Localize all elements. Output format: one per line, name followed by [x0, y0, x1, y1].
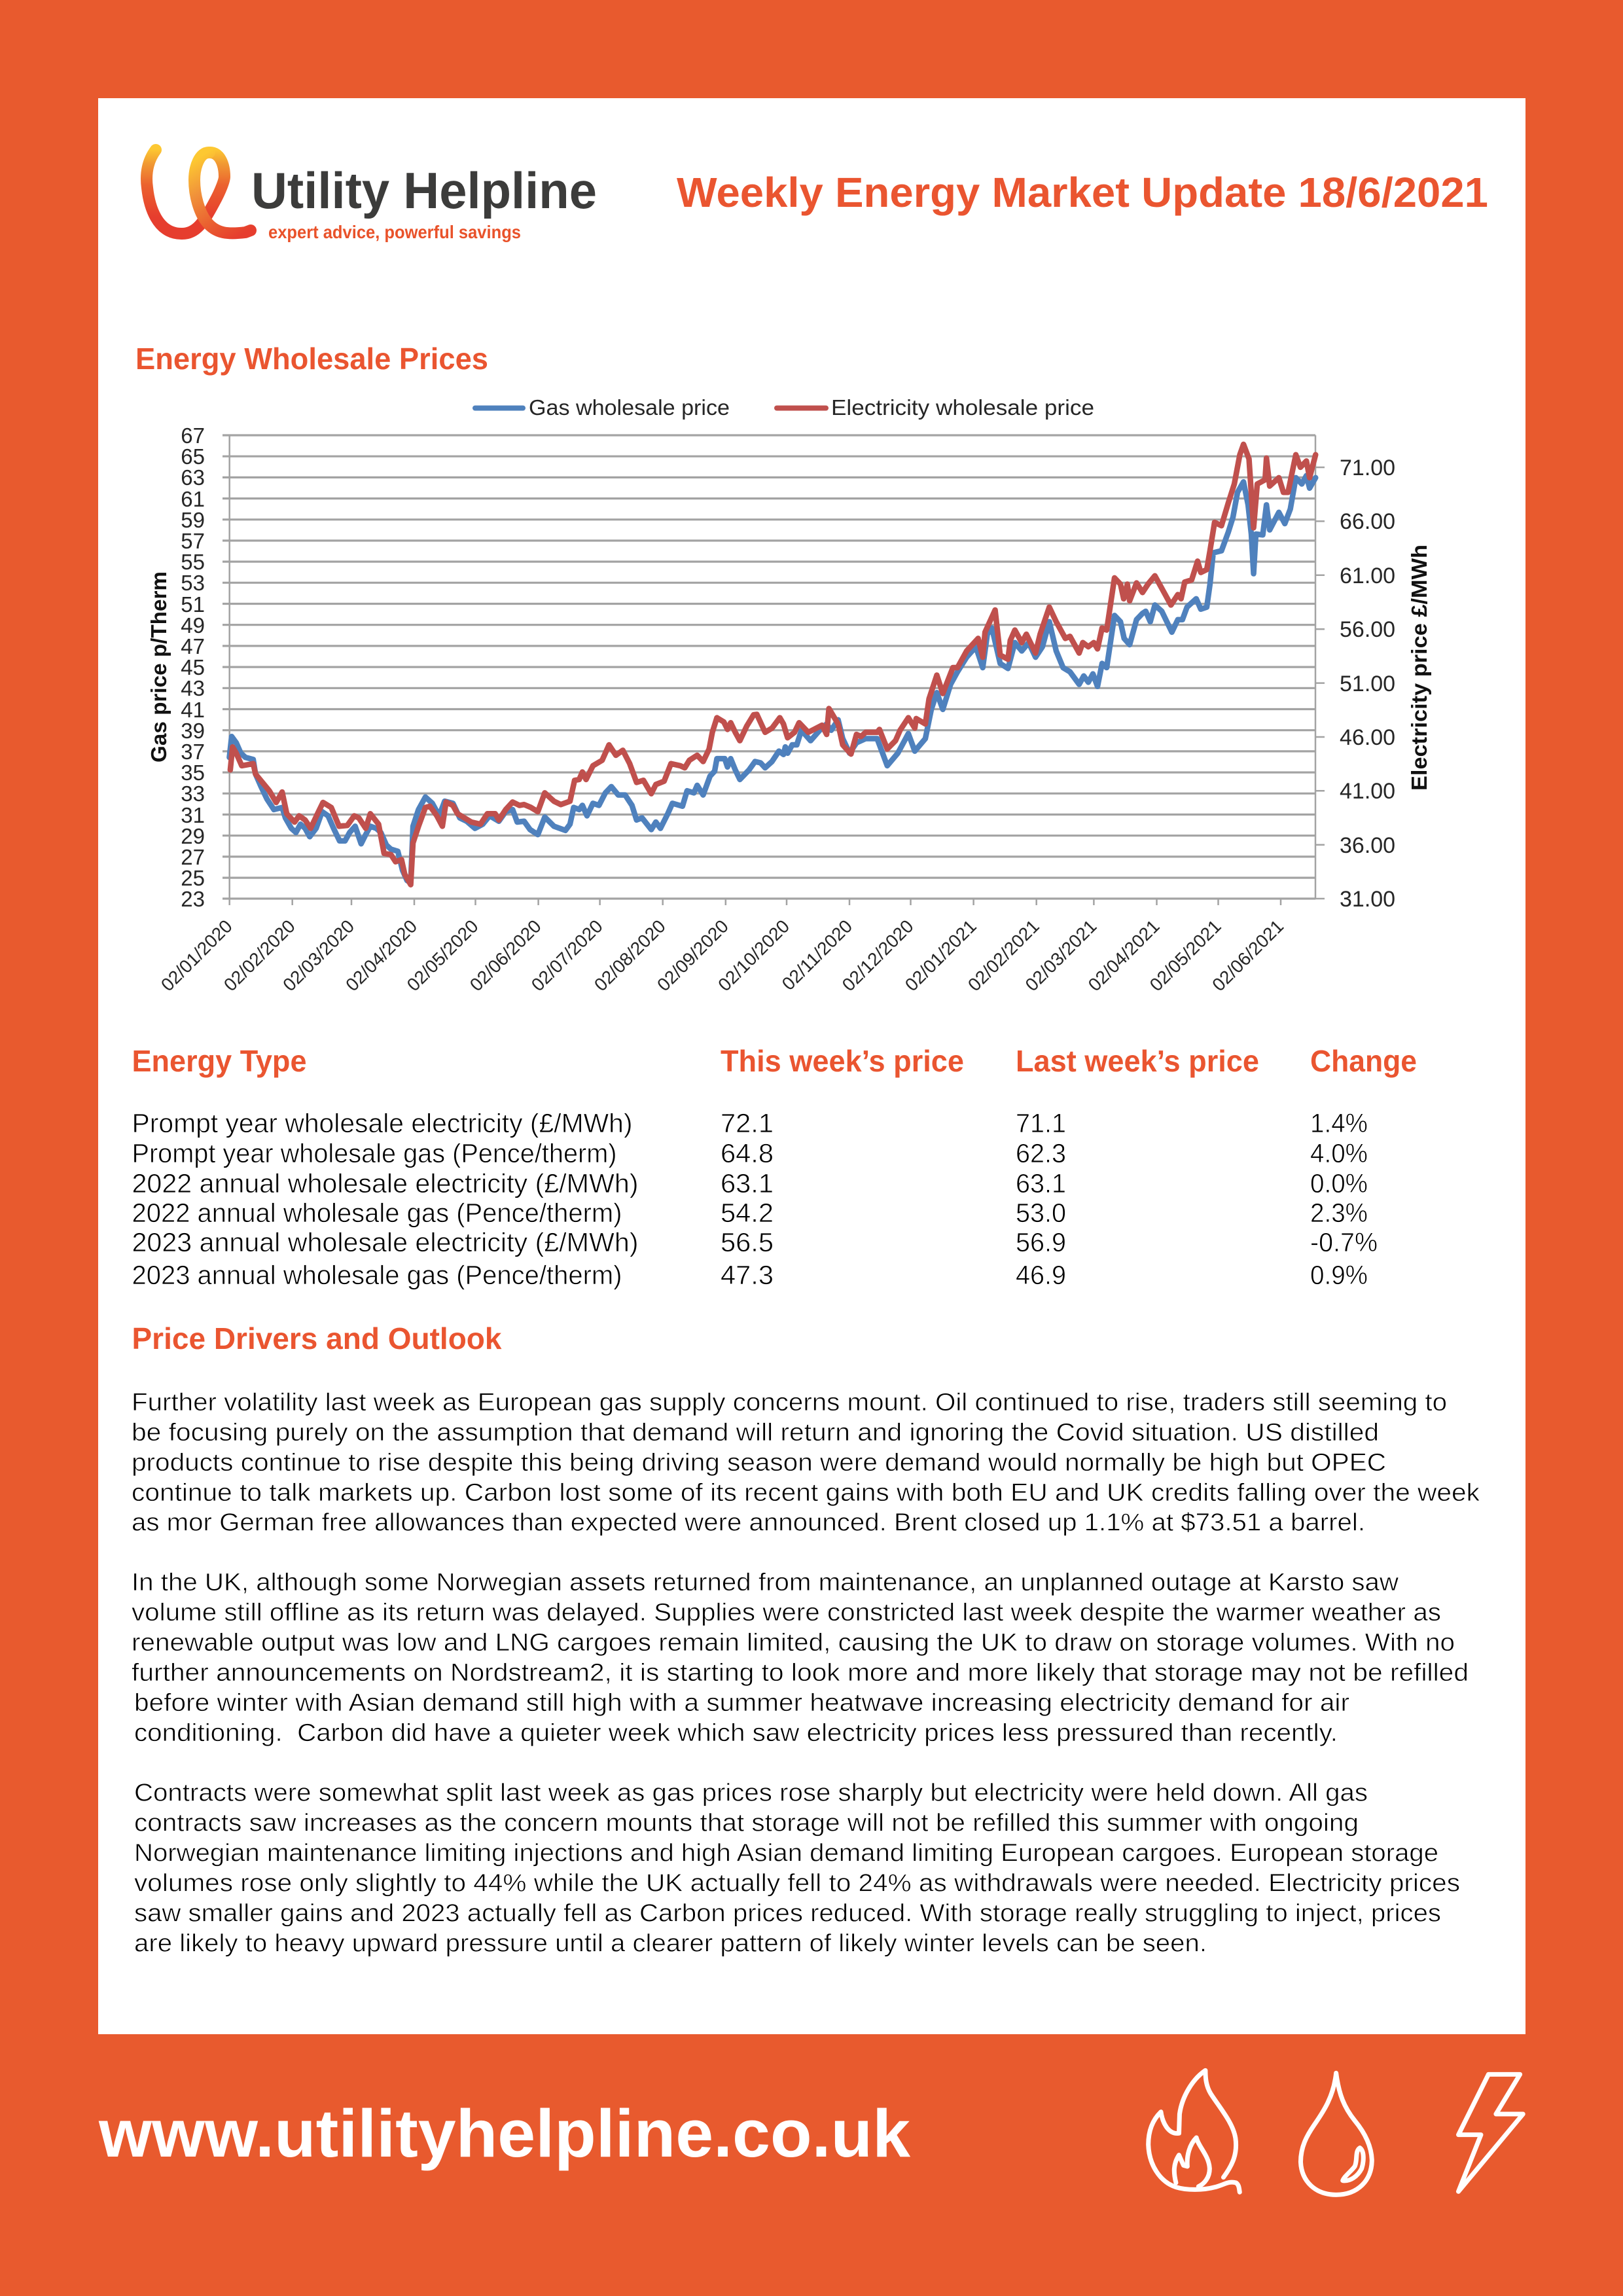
chart legend: Electricity wholesale price: [831, 395, 1094, 420]
table row: 2022 gas: 2.3%: [1310, 1198, 1368, 1228]
x axis date labels: 02/05/2021: [1146, 916, 1225, 995]
logo tagline: expert advice, powerful savings: [268, 222, 521, 242]
right axis labels: electricity price: 36.00: [1340, 833, 1395, 858]
heading: Energy Wholesale Prices: Energy Wholesale Prices: [135, 342, 488, 376]
left axis labels: gas price: 39: [181, 719, 205, 743]
right axis labels: electricity price: 41.00: [1340, 779, 1395, 804]
right axis title: Electricity price £/MWh: [1407, 545, 1431, 791]
x axis date labels: 02/12/2020: [838, 916, 918, 995]
x axis date labels: 02/01/2021: [901, 916, 980, 995]
logo: Utility Helpline: [147, 150, 597, 242]
table row: 2023 gas: 2023 annual wholesale gas (Pence/therm): [132, 1260, 622, 1290]
logo wordmark: Utility Helpline: [251, 162, 597, 219]
table row: prompt year gas: 4.0%: [1310, 1138, 1368, 1168]
table row: 2022 electricity: 63.1: [721, 1168, 774, 1198]
table row: prompt year gas: Prompt year wholesale gas (Pence/therm): [132, 1138, 616, 1168]
x axis date labels: 02/03/2021: [1022, 916, 1101, 995]
table row: 2023 gas: 46.9: [1016, 1260, 1066, 1290]
gas price series: [229, 476, 1315, 883]
table row: prompt year electricity: 1.4%: [1310, 1108, 1368, 1138]
left axis labels: gas price: 31: [181, 803, 205, 827]
table row: 2023 electricity: [132, 1227, 1378, 1257]
text block: paragraph 2: In the UK, although some Norwegian assets returned from maintenance, an unplanned outage at Karsto saw: [132, 1569, 1399, 1596]
table row: 2023 gas: 0.9%: [1310, 1260, 1368, 1290]
table row: 2023 electricity: -0.7%: [1310, 1227, 1378, 1257]
table header row: Energy Type: [132, 1044, 306, 1078]
text block: paragraph 2: volume still offline as its return was delayed. Supplies were constricted last week despite the warmer weather as: [132, 1599, 1441, 1626]
x axis date labels: 02/04/2021: [1084, 916, 1164, 995]
text block: paragraph 1: as mor German free allowances than expected were announced. Brent closed up 1.1% at $73.51 a barrel.: [132, 1509, 1365, 1537]
table row: 2022 electricity: 2022 annual wholesale electricity (£/MWh): [132, 1168, 638, 1198]
table row: prompt year gas: [132, 1138, 1368, 1168]
left axis labels: gas price: 43: [181, 676, 205, 700]
left axis labels: gas price: 59: [181, 508, 205, 532]
text block: paragraph 3: [134, 1779, 1460, 1957]
table row: 2023 gas: 47.3: [721, 1260, 774, 1290]
x axis date labels: 02/07/2020: [527, 916, 607, 995]
table row: 2022 gas: 2022 annual wholesale gas (Pence/therm): [132, 1198, 622, 1228]
table row: prompt year electricity: 72.1: [721, 1108, 774, 1138]
icon: gas flame: [1149, 2070, 1240, 2192]
left axis labels: gas price: 67: [181, 423, 205, 448]
text block: paragraph 2: [132, 1569, 1469, 1747]
table header row: [132, 1044, 1417, 1078]
x axis date labels: 02/08/2020: [590, 916, 669, 995]
x axis date labels: 02/09/2020: [653, 916, 732, 995]
left axis labels: gas price: 51: [181, 592, 205, 617]
left axis labels: gas price: 57: [181, 529, 205, 553]
table row: 2023 electricity: 56.5: [721, 1227, 774, 1257]
left axis labels: gas price: 61: [181, 487, 205, 511]
left axis labels: gas price: 27: [181, 845, 205, 869]
x axis date labels: 02/02/2021: [964, 916, 1043, 995]
left axis labels: gas price: 25: [181, 866, 205, 890]
text block: paragraph 1: [132, 1389, 1480, 1537]
title: Weekly Energy Market Update 18/6/2021: [677, 169, 1488, 216]
text block: paragraph 3: Norwegian maintenance limiting injections and high Asian demand limiting European cargoes. European storage: [134, 1839, 1438, 1867]
table row: 2022 gas: 54.2: [721, 1198, 774, 1228]
x axis date labels: 02/05/2020: [403, 916, 482, 995]
heading: Price Drivers and Outlook: Price Drivers and Outlook: [132, 1321, 502, 1355]
left axis labels: gas price: 49: [181, 613, 205, 637]
table header row: Last week’s price: [1016, 1044, 1259, 1078]
text block: paragraph 1: Further volatility last week as European gas supply concerns mount. Oil continued to rise, traders still seeming to: [132, 1389, 1447, 1416]
table row: prompt year electricity: [132, 1108, 1368, 1138]
right axis labels: electricity price: 31.00: [1340, 887, 1395, 912]
table row: 2022 gas: 53.0: [1016, 1198, 1066, 1228]
footer website URL: www.utilityhelpline.co.uk: [98, 2096, 911, 2171]
left axis title: Gas price p/Therm: [147, 571, 171, 762]
text block: paragraph 3: are likely to heavy upward pressure until a clearer pattern of likely winter levels can be seen.: [134, 1929, 1207, 1957]
right axis labels: electricity price: 66.00: [1340, 509, 1395, 534]
table row: 2023 gas: [132, 1260, 1368, 1290]
table header row: Change: [1310, 1044, 1417, 1078]
text block: paragraph 3: contracts saw increases as the concern mounts that storage will not be refilled this summer with ongoing: [134, 1809, 1359, 1837]
text block: paragraph 2: renewable output was low and LNG cargoes remain limited, causing the UK to draw on storage volumes. With no: [132, 1629, 1455, 1657]
table row: prompt year electricity: 71.1: [1016, 1108, 1066, 1138]
right axis labels: electricity price: 56.00: [1340, 617, 1395, 642]
x axis date labels: 02/11/2020: [778, 916, 856, 994]
icon: water drop: [1300, 2073, 1372, 2195]
text block: paragraph 2: conditioning. Carbon did have a quieter week which saw electricity prices less pressured than recently.: [134, 1719, 1338, 1747]
text block: paragraph 2: further announcements on Nordstream2, it is starting to look more and more likely that storage may not be refilled: [132, 1659, 1469, 1687]
right axis labels: electricity price: 46.00: [1340, 725, 1395, 750]
table: energy prices: [132, 1044, 1417, 1290]
left axis labels: gas price: [181, 423, 205, 911]
text block: paragraph 3: saw smaller gains and 2023 actually fell as Carbon prices reduced. With storage really struggling to inject, prices: [134, 1899, 1441, 1927]
text block: paragraph 3: volumes rose only slightly to 44% while the UK actually fell to 24% as withdrawals were needed. Electricity prices: [134, 1869, 1460, 1897]
x axis date labels: 02/01/2020: [157, 916, 236, 995]
white content panel: [98, 98, 1525, 2034]
right axis labels: electricity price: 71.00: [1340, 456, 1395, 480]
right axis labels: electricity price: 51.00: [1340, 672, 1395, 696]
table header row: This week’s price: [721, 1044, 964, 1078]
left axis labels: gas price: 45: [181, 655, 205, 679]
table row: 2023 electricity: 56.9: [1016, 1227, 1066, 1257]
left axis labels: gas price: 37: [181, 740, 205, 764]
left axis labels: gas price: 65: [181, 444, 205, 469]
left axis labels: gas price: 47: [181, 634, 205, 658]
chart grid and axes: [223, 435, 1325, 905]
x axis date labels: 02/06/2021: [1208, 916, 1287, 995]
x axis date labels: 02/04/2020: [342, 916, 421, 995]
left axis labels: gas price: 35: [181, 761, 205, 785]
table row: 2022 electricity: 63.1: [1016, 1168, 1066, 1198]
text block: paragraph 1: be focusing purely on the assumption that demand will return and ignoring the Covid situation. US distilled: [132, 1419, 1379, 1446]
left axis labels: gas price: 23: [181, 887, 205, 911]
text block: paragraph 1: continue to talk markets up. Carbon lost some of its recent gains with both EU and UK credits falling over the week: [132, 1479, 1480, 1507]
table row: 2023 electricity: 2023 annual wholesale electricity (£/MWh): [132, 1227, 638, 1257]
electricity price series: [230, 444, 1315, 885]
text block: paragraph 3: Contracts were somewhat split last week as gas prices rose sharply but electricity were held down. All gas: [134, 1779, 1368, 1806]
left axis labels: gas price: 33: [181, 781, 205, 806]
x axis date labels: 02/03/2020: [279, 916, 358, 995]
table row: 2022 gas: [132, 1198, 1368, 1228]
chart legend: Gas wholesale price: [529, 395, 730, 420]
text block: paragraph 2: before winter with Asian demand still high with a summer heatwave increasing electricity demand for air: [134, 1689, 1349, 1717]
x axis date labels: 02/10/2020: [714, 916, 793, 995]
icon: lightning bolt: [1459, 2074, 1523, 2191]
x axis date labels: 02/02/2020: [220, 916, 299, 995]
table row: 2022 electricity: [132, 1168, 1368, 1198]
right axis labels: electricity price: [1340, 456, 1395, 912]
left axis labels: gas price: 41: [181, 698, 205, 722]
right axis labels: electricity price: 61.00: [1340, 564, 1395, 588]
left axis labels: gas price: 53: [181, 571, 205, 595]
table row: prompt year electricity: Prompt year wholesale electricity (£/MWh): [132, 1108, 632, 1138]
left axis labels: gas price: 55: [181, 550, 205, 574]
table row: prompt year gas: 62.3: [1016, 1138, 1066, 1168]
text block: paragraph 1: products continue to rise despite this being driving season were demand would normally be high but OPEC: [132, 1449, 1386, 1477]
chart legend: [475, 395, 1094, 420]
x axis date labels: [157, 916, 1287, 995]
x axis date labels: 02/06/2020: [466, 916, 545, 995]
logo icon: looped ribbon: [147, 150, 251, 234]
table row: prompt year gas: 64.8: [721, 1138, 774, 1168]
left axis labels: gas price: 29: [181, 824, 205, 848]
line chart: gas and electricity wholesale prices: [147, 395, 1431, 995]
left axis labels: gas price: 63: [181, 465, 205, 490]
table row: 2022 electricity: 0.0%: [1310, 1168, 1368, 1198]
